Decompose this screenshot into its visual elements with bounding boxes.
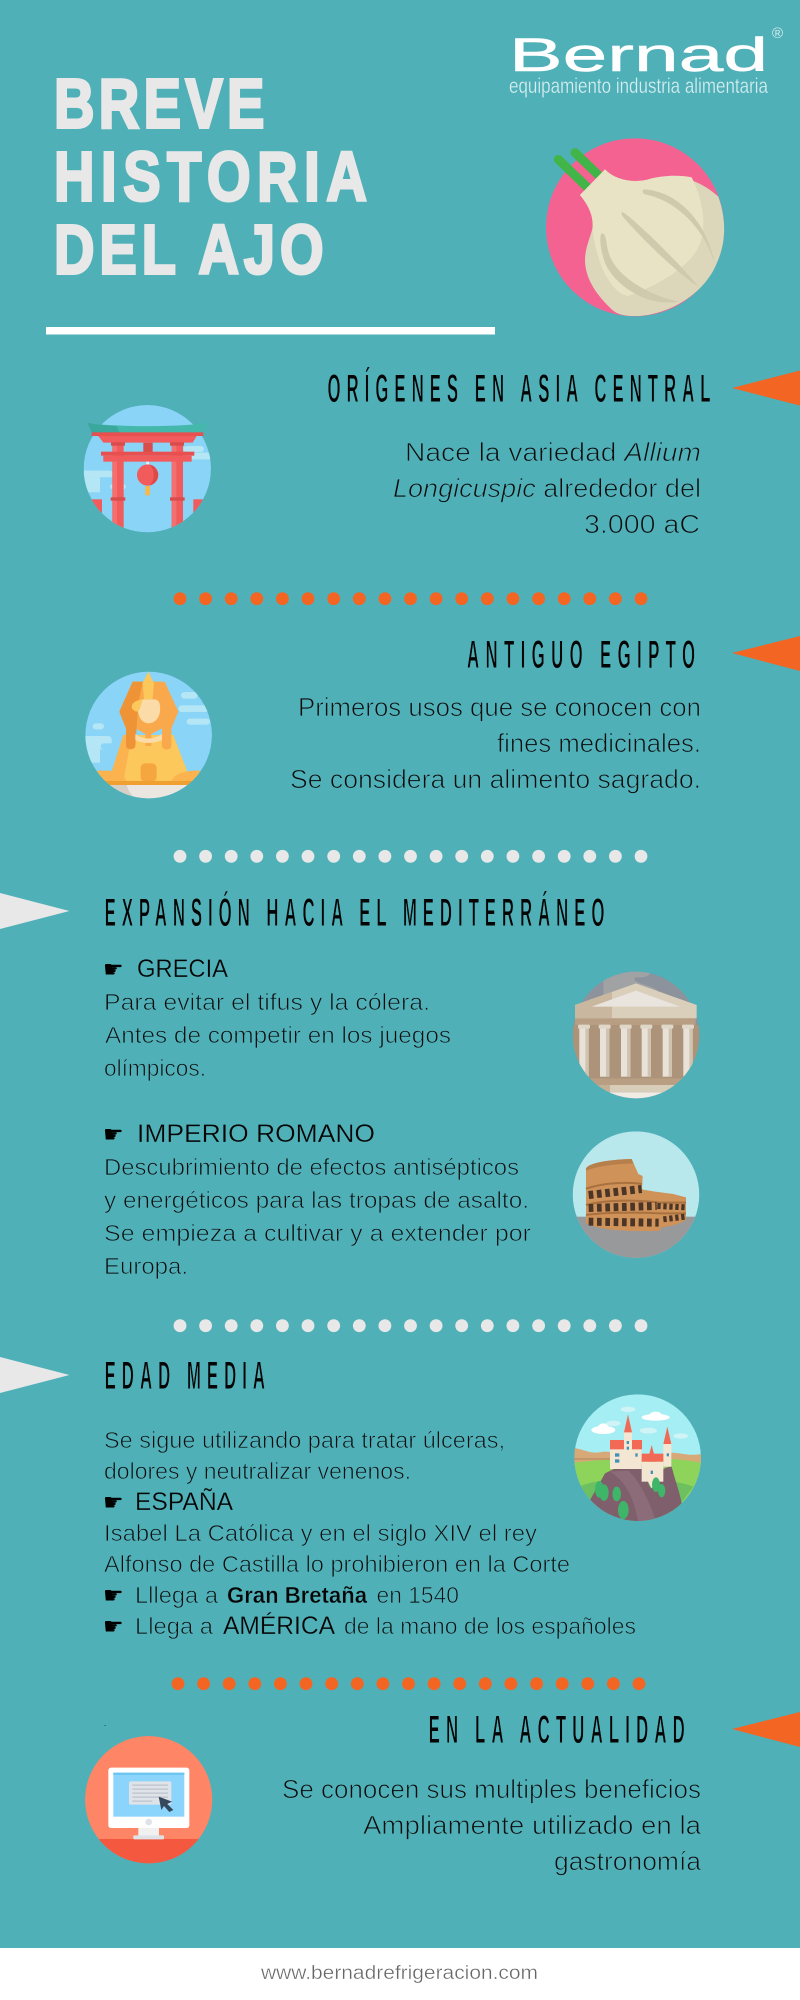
text block: edad media: [103, 1427, 636, 1640]
text block: Imperio Romano: ☛: [103, 1122, 124, 1148]
text block: edad media: de la mano de los españoles: [344, 1613, 636, 1639]
logo: Bernad: ®: [772, 25, 783, 42]
logo: Bernad: Bernad: [509, 28, 768, 81]
heading: edad media: EDAD MEDIA: [105, 1354, 265, 1398]
text block: Imperio Romano: Se empieza a cultivar y a extender por: [104, 1220, 531, 1246]
heading: en la actualidad: EN LA ACTUALIDAD: [429, 1708, 685, 1752]
icon: garlic: [546, 138, 724, 316]
title: DEL AJO: [54, 212, 324, 289]
text block: edad media: Llega a: [135, 1613, 214, 1639]
text block: orígenes: 3.000 aC: [584, 509, 700, 539]
arrow: white pointer: [0, 893, 69, 929]
text block: edad media: Alfonso de Castilla lo prohibieron en la Corte: [104, 1551, 570, 1577]
panel: edad media: [0, 1354, 703, 1640]
heading: orígenes: ORÍGENES EN ASIA CENTRAL: [328, 365, 711, 411]
text block: edad media: Lllega a: [135, 1582, 219, 1608]
text block: antiguo Egipto: fines medicinales.: [497, 728, 701, 758]
text block: en la actualidad: gastronomía: [554, 1846, 702, 1876]
text block: Grecia: ☛: [103, 957, 124, 983]
text block: Imperio Romano: y energéticos para las tropas de asalto.: [104, 1187, 529, 1213]
dotted divider: white: [174, 850, 647, 863]
text block: orígenes: Nace la variedad Allium: [405, 437, 701, 467]
text block: Grecia: Antes de competir en los juegos: [105, 1022, 451, 1048]
text block: edad media: ESPAÑA: [135, 1487, 233, 1516]
text block: Imperio Romano: Europa.: [104, 1253, 188, 1279]
text block: Grecia: [103, 955, 451, 1081]
text block: antiguo Egipto: [290, 692, 701, 794]
panel: orígenes en Asia Central: [80, 365, 800, 539]
text block: en la actualidad: [282, 1774, 702, 1876]
arrow: orange pointer: [732, 636, 800, 671]
icon: torii gate: [80, 405, 213, 533]
arrow: white pointer: [0, 1357, 69, 1393]
icon: castle: [570, 1394, 703, 1527]
text block: orígenes: Longicuspic alrededor del: [393, 473, 701, 503]
arrow: orange pointer: [732, 1712, 800, 1747]
icon: greek temple: [570, 970, 703, 1099]
text block: edad media: Isabel La Católica y en el siglo XIV el rey: [104, 1520, 537, 1546]
stray dot: .: [104, 1719, 106, 1728]
icon: colosseum: [570, 1131, 703, 1260]
title: HISTORIA: [54, 139, 367, 216]
title: BREVE: [54, 66, 264, 143]
footer: [0, 1948, 800, 2000]
text block: edad media: ☛: [103, 1614, 124, 1640]
panel: expansión hacia el Mediterráneo: [0, 888, 703, 1279]
heading: antiguo Egipto: ANTIGUO EGIPTO: [467, 633, 695, 677]
footer url: www.bernadrefrigeracion.com: [260, 1963, 538, 1984]
text block: edad media: Se sigue utilizando para tratar úlceras,: [104, 1427, 505, 1453]
text block: en la actualidad: Ampliamente utilizado en la: [363, 1810, 702, 1840]
text block: edad media: AMÉRICA: [223, 1611, 335, 1640]
arrow: orange pointer: [732, 370, 800, 406]
text block: Grecia: Para evitar el tifus y la cólera.: [104, 989, 430, 1015]
text block: Imperio Romano: [103, 1120, 531, 1279]
text block: edad media: dolores y neutralizar venenos.: [104, 1458, 411, 1484]
icon: computer: [85, 1736, 212, 1864]
text block: Grecia: olímpicos.: [104, 1055, 206, 1081]
heading: expansión: EXPANSIÓN HACIA EL MEDITERRÁNEO: [105, 888, 604, 935]
text block: orígenes: [393, 437, 701, 539]
logo: Bernad: [509, 25, 783, 98]
text block: edad media: Gran Bretaña: [227, 1582, 368, 1608]
text block: edad media: en 1540: [376, 1582, 459, 1608]
dotted divider: orange: [174, 592, 647, 605]
dotted divider: white: [174, 1319, 647, 1332]
text block: edad media: ☛: [103, 1490, 124, 1516]
title: [54, 66, 367, 289]
text block: antiguo Egipto: Se considera un alimento sagrado.: [290, 764, 701, 794]
text block: Imperio Romano: Descubrimiento de efectos antisépticos: [104, 1154, 519, 1180]
text block: Grecia: GRECIA: [137, 955, 228, 983]
divider line: [46, 327, 495, 334]
text block: Imperio Romano: IMPERIO ROMANO: [137, 1120, 375, 1148]
icon: sphinx: [85, 672, 212, 798]
text block: edad media: ☛: [103, 1583, 124, 1609]
panel: antiguo Egipto: [80, 633, 800, 805]
text block: en la actualidad: Se conocen sus multiples beneficios: [282, 1774, 701, 1804]
panel: en la actualidad: [80, 1708, 800, 1876]
dotted divider: orange: [172, 1677, 645, 1690]
text block: antiguo Egipto: Primeros usos que se conocen con: [298, 692, 701, 722]
